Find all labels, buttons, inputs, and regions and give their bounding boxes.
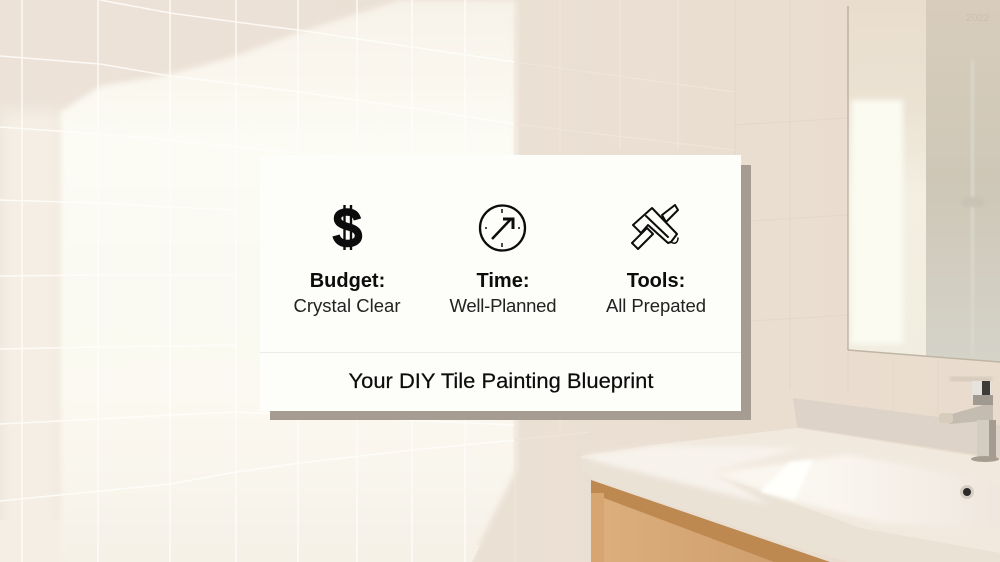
tools heading: Tools: <box>627 270 685 292</box>
counter surface <box>581 428 1000 562</box>
tile grout lines <box>0 0 515 562</box>
time detail: Well-Planned <box>450 295 556 316</box>
vanity cabinet <box>591 480 830 562</box>
item: time <box>450 206 556 316</box>
faucet <box>939 377 999 462</box>
time heading: Time: <box>477 270 529 292</box>
countertop and basin <box>581 398 1000 562</box>
budget detail: Crystal Clear <box>294 295 400 316</box>
footer title: Your DIY Tile Painting Blueprint <box>348 370 654 393</box>
tools detail: All Prepated <box>606 295 706 316</box>
budget heading: Budget: <box>310 270 385 292</box>
icon: paint roller <box>632 205 678 249</box>
watermark year: 2022 <box>966 12 990 24</box>
info card <box>260 155 751 420</box>
mirror <box>848 0 1000 362</box>
item: tools <box>606 205 706 316</box>
sink overflow hole <box>960 485 974 499</box>
card panel <box>260 155 741 411</box>
item: budget <box>294 205 400 316</box>
card shadow <box>270 165 751 420</box>
icon: clock with arrow <box>480 206 525 250</box>
marble backsplash <box>793 398 1000 458</box>
sunlight patch on the wall <box>60 0 516 562</box>
sink basin <box>713 455 1000 530</box>
icon: dollar sign <box>336 205 358 250</box>
